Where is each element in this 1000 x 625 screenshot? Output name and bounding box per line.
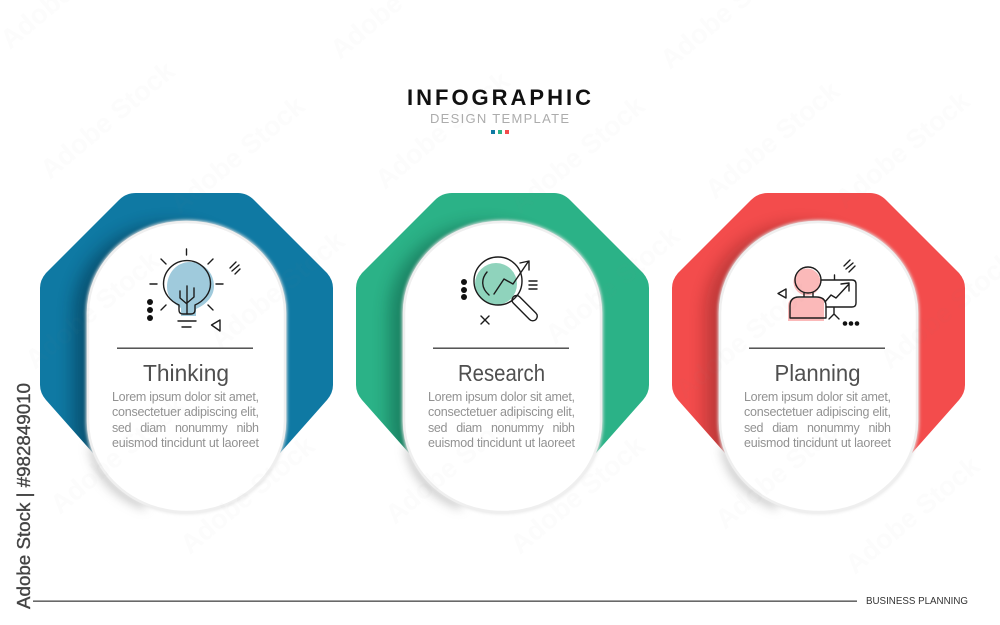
- body text: [744, 390, 892, 450]
- icon: presenter with chart board: [778, 260, 859, 326]
- body text: consectetuer adipiscing elit,: [112, 405, 259, 419]
- icon: magnifier with chart: [461, 257, 539, 324]
- body text: [428, 390, 576, 450]
- body text: Lorem ipsum dolor sit amet,: [112, 390, 259, 404]
- watermark: Adobe Stock: [165, 90, 311, 220]
- footer label: BUSINESS PLANNING: [866, 596, 968, 607]
- divider: [749, 348, 885, 349]
- card shadow on octagon: [66, 216, 184, 452]
- panel: planning: [672, 193, 965, 514]
- watermark: Adobe Stock: [670, 275, 816, 405]
- watermark: Adobe Stock: [830, 85, 976, 215]
- body text: Lorem ipsum dolor sit amet,: [744, 390, 891, 404]
- card soft edge: [718, 220, 919, 514]
- watermark: Adobe Stock: [370, 65, 516, 195]
- white card: [88, 222, 285, 512]
- card outer shadow: [720, 445, 782, 510]
- card shadow on octagon: [382, 216, 498, 452]
- body text: euismod tincidunt ut laoreet: [428, 436, 576, 450]
- divider: [117, 348, 253, 349]
- card soft edge: [402, 220, 603, 514]
- watermark: Adobe Stock: [35, 55, 181, 185]
- body text: consectetuer adipiscing elit,: [744, 405, 891, 419]
- watermark: Adobe Stock: [840, 450, 986, 580]
- watermark: Adobe Stock: [540, 220, 686, 350]
- subtitle: DESIGN TEMPLATE: [430, 111, 569, 126]
- body text: Lorem ipsum dolor sit amet,: [428, 390, 575, 404]
- white card: [404, 222, 601, 512]
- octagon background green: [356, 193, 649, 470]
- body text: sed diam nonummy nibh: [112, 421, 259, 435]
- watermark: Adobe Stock: [505, 90, 651, 220]
- card soft edge: [86, 220, 287, 514]
- octagon background red: [672, 193, 965, 470]
- watermark: Adobe Stock: [700, 75, 846, 205]
- footer rule: [33, 600, 857, 602]
- body text: sed diam nonummy nibh: [428, 421, 575, 435]
- divider: [433, 348, 569, 349]
- watermark: Adobe Stock: [175, 430, 321, 560]
- body text: euismod tincidunt ut laoreet: [744, 436, 892, 450]
- card outer shadow: [404, 445, 466, 510]
- heading: Planning: [774, 360, 860, 386]
- title: INFOGRAPHIC: [407, 85, 591, 110]
- body text: [112, 390, 260, 450]
- card shadow on octagon: [697, 216, 818, 452]
- watermark: Adobe Stock: [45, 390, 191, 520]
- body text: consectetuer adipiscing elit,: [428, 405, 575, 419]
- watermark: Adobe Stock: [20, 245, 166, 375]
- watermark: Adobe Stock: [710, 405, 856, 535]
- panel: thinking: [40, 193, 333, 514]
- icon: light bulb: [147, 249, 240, 331]
- white card: [720, 222, 917, 512]
- card outer shadow: [88, 445, 150, 510]
- heading: Thinking: [143, 360, 229, 386]
- panel: research: [356, 193, 649, 514]
- heading: Research: [458, 360, 545, 386]
- body text: euismod tincidunt ut laoreet: [112, 436, 260, 450]
- title colour markers: [491, 130, 509, 134]
- body text: sed diam nonummy nibh: [744, 421, 891, 435]
- side stock id: Adobe Stock | #982849010: [14, 383, 34, 609]
- watermark: Adobe Stock: [205, 225, 351, 355]
- octagon background blue: [40, 193, 333, 470]
- watermark: Adobe Stock: [505, 430, 651, 560]
- watermark: Adobe Stock: [380, 400, 526, 530]
